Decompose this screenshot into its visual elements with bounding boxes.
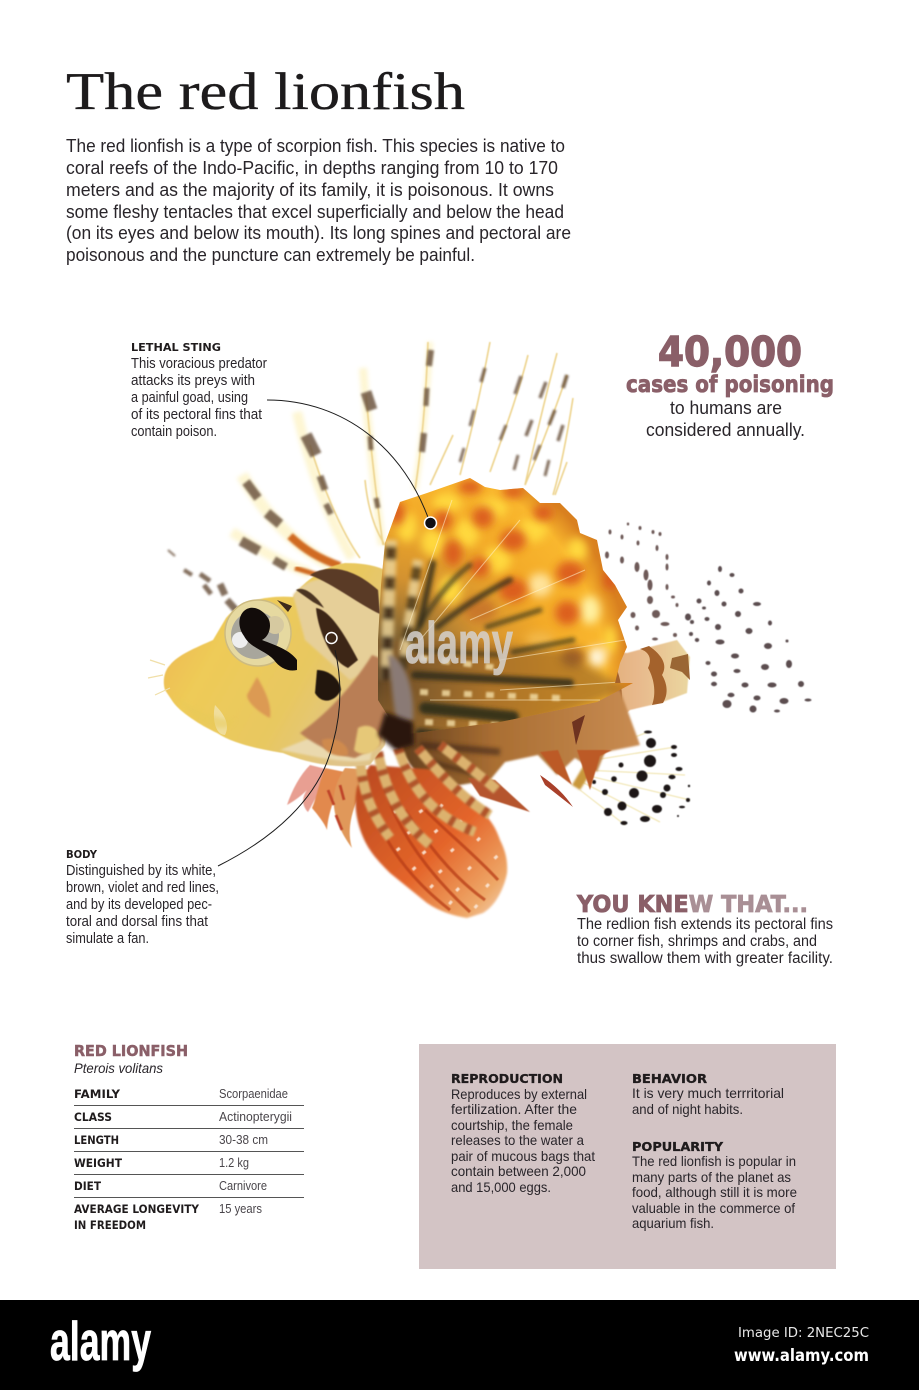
you knew that: The redlion fish extends its pectoral fins [577, 916, 833, 933]
orange patches [389, 480, 617, 667]
panel: reproduction, behavior, popularity [419, 1044, 836, 1269]
footer bar [0, 1300, 919, 1390]
popularity text: aquarium fish. [632, 1215, 714, 1231]
stat: 40,000 cases: to humans are [670, 398, 782, 418]
behavior text: and of night habits. [632, 1101, 743, 1117]
behavior text: BEHAVIOR [632, 1071, 707, 1086]
species data table: Actinopterygii [219, 1109, 292, 1124]
reproduction text: contain between 2,000 [451, 1163, 586, 1179]
popularity text [632, 1139, 797, 1231]
species data table: DIET [74, 1179, 101, 1193]
cream dashes [420, 658, 560, 728]
popularity text: valuable in the commerce of [632, 1200, 795, 1216]
species data table: WEIGHT [74, 1156, 122, 1170]
callout: lethal sting [131, 341, 267, 440]
you knew that: thus swallow them with greater facility. [577, 950, 833, 967]
popularity text: The red lionfish is popular in [632, 1153, 796, 1169]
callout: body: brown, violet and red lines, [66, 880, 219, 896]
footer bar: alamy [50, 1310, 151, 1372]
intro text: meters and as the majority of its family, it is poisonous. It owns [66, 179, 554, 200]
caudal fin [685, 566, 812, 712]
callout: body [66, 848, 219, 947]
lower pectoral fin [355, 765, 507, 918]
dorsal soft fin [605, 522, 678, 640]
you knew that [576, 892, 833, 967]
species data table: AVERAGE LONGEVITY [74, 1202, 200, 1216]
callout: lethal sting: This voracious predator [131, 356, 267, 372]
eye [225, 600, 297, 671]
callout: lethal sting: a painful goad, using [131, 390, 248, 406]
reproduction text: fertilization. After the [451, 1101, 577, 1117]
behavior text: It is very much terrritorial [632, 1085, 784, 1101]
species data table: 15 years [219, 1201, 262, 1216]
callout: body: simulate a fan. [66, 931, 149, 947]
lower body [395, 690, 640, 812]
intro text: poisonous and the puncture can extremely be painful. [66, 244, 475, 265]
reproduction text: courtship, the female [451, 1117, 573, 1133]
species data table: LENGTH [74, 1133, 119, 1147]
intro text [66, 135, 571, 265]
popularity text: many parts of the planet as [632, 1169, 791, 1185]
lionfish illustration [148, 342, 812, 918]
pectoral fan [378, 478, 633, 734]
intro text: some fleshy tentacles that excel superficially and below the head [66, 201, 564, 222]
bright yellow patches [397, 493, 616, 667]
leader line: body [218, 632, 340, 866]
callout: body: BODY [66, 848, 98, 861]
species data table [74, 1042, 304, 1232]
callout: body: Distinguished by its white, [66, 863, 216, 879]
reproduction text: REPRODUCTION [451, 1071, 563, 1086]
behavior text [632, 1071, 784, 1117]
callout: lethal sting: attacks its preys with [131, 373, 255, 389]
intro text: coral reefs of the Indo-Pacific, in depths ranging from 10 to 170 [66, 157, 558, 178]
you knew that: to corner fish, shrimps and crabs, and [577, 933, 817, 950]
body and head [148, 563, 395, 766]
intro text: The red lionfish is a type of scorpion fish. This species is native to [66, 135, 565, 156]
title: The red lionfish [66, 63, 465, 121]
species data table: Carnivore [219, 1178, 267, 1193]
stat: 40,000 cases: 40,000 [658, 328, 802, 376]
you knew that: YOU KNEW THAT... [576, 892, 808, 918]
species data table: Scorpaenidae [219, 1086, 288, 1101]
head markings [310, 569, 380, 614]
small lower-left fins [287, 765, 372, 848]
reproduction text: releases to the water a [451, 1132, 584, 1148]
popularity text: POPULARITY [632, 1139, 724, 1154]
callout: body: and by its developed pec- [66, 897, 212, 913]
dark hollow [378, 712, 414, 750]
watermark: alamy [405, 611, 513, 676]
left fringe checks [386, 540, 418, 680]
reproduction text [451, 1071, 595, 1195]
dark rays [412, 563, 573, 742]
anal fin [572, 730, 690, 825]
lower fan shading [378, 640, 630, 735]
footer bar: www.alamy.com [734, 1346, 869, 1365]
callout: lethal sting: of its pectoral fins that [131, 407, 262, 423]
callout: lethal sting: contain poison. [131, 424, 217, 440]
dorsal spines [168, 342, 573, 610]
banded rays [360, 745, 497, 845]
species data table: CLASS [74, 1110, 112, 1124]
pale highlight lines [400, 500, 625, 700]
species data table: IN FREEDOM [74, 1218, 146, 1232]
species data table: 30-38 cm [219, 1132, 268, 1147]
reproduction text: Reproduces by external [451, 1086, 587, 1102]
reproduction text: and 15,000 eggs. [451, 1179, 551, 1195]
stat: 40,000 cases: considered annually. [646, 420, 805, 440]
species data table: RED LIONFISH [74, 1042, 188, 1060]
callout: body: toral and dorsal fins that [66, 914, 208, 930]
leader line: lethal sting [267, 400, 436, 529]
species data table: 1.2 kg [219, 1155, 249, 1170]
stat: 40,000 cases: cases of poisoning [626, 372, 834, 398]
fan grey base [388, 655, 413, 725]
species data table: FAMILY [74, 1087, 121, 1101]
tail peduncle [560, 640, 690, 747]
footer bar: Image ID: 2NEC25C [738, 1326, 869, 1341]
popularity text: food, although still it is more [632, 1184, 797, 1200]
intro text: (on its eyes and below its mouth). Its long spines and pectoral are [66, 222, 571, 243]
stat: 40,000 cases [626, 328, 834, 440]
reproduction text: pair of mucous bags that [451, 1148, 595, 1164]
callout: lethal sting: LETHAL STING [131, 341, 221, 354]
species data table: Pterois volitans [74, 1060, 163, 1076]
